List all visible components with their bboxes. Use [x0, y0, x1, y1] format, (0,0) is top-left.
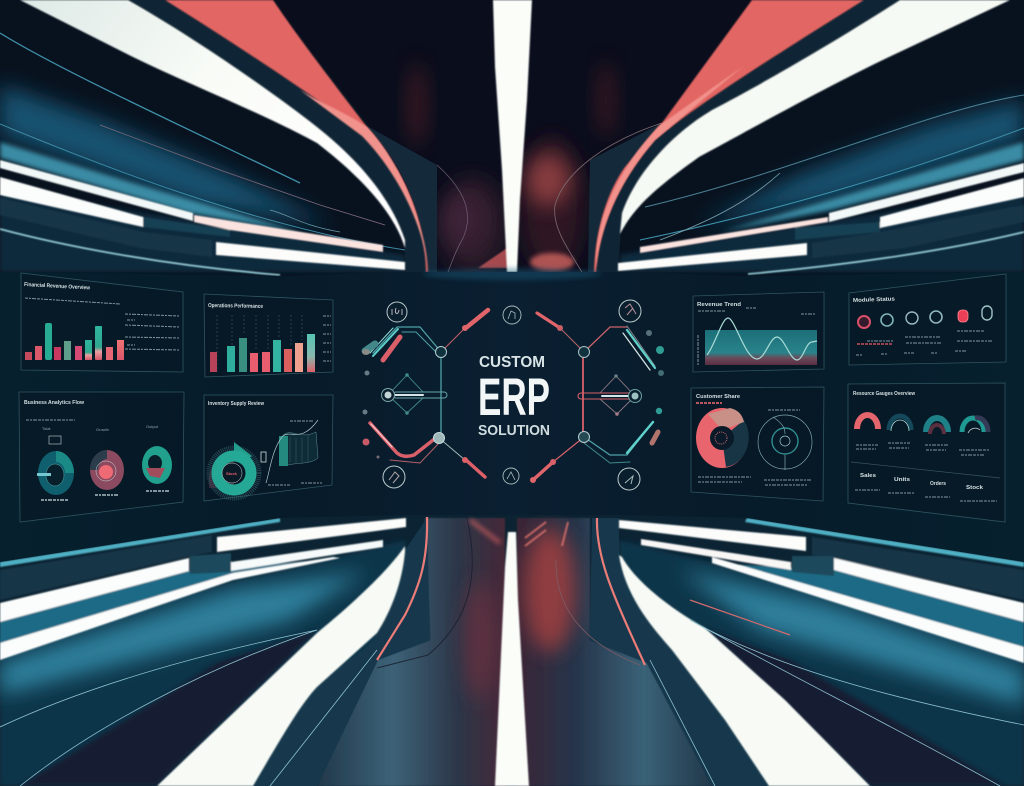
panel heading: Financial Revenue Overview — [24, 282, 91, 291]
panel heading: Module Status — [853, 297, 895, 304]
kpi labels: Sales — [860, 473, 876, 479]
donut one: Total — [42, 426, 51, 431]
title text: ERP — [478, 368, 550, 427]
panel heading: Revenue Trend — [697, 302, 742, 308]
panel: gauges and kpis — [848, 383, 1005, 522]
donut one — [37, 426, 74, 500]
status icons — [858, 306, 992, 328]
right dashboards — [691, 274, 1006, 522]
wave chart — [261, 420, 322, 485]
coral reflected lines — [377, 517, 790, 668]
coral donut — [696, 408, 749, 468]
centre floor — [317, 518, 505, 786]
white band right — [620, 0, 1010, 234]
centre white strip top — [493, 0, 532, 272]
donut three: Output — [146, 424, 159, 429]
bottom section: reflected light streaks — [0, 517, 1024, 786]
right nodes and icons — [530, 300, 664, 490]
white band bottom right — [619, 555, 870, 786]
donut three — [142, 424, 172, 491]
gauges — [857, 415, 988, 434]
outline donut — [758, 415, 812, 470]
coral band right — [594, 0, 864, 272]
title text: CUSTOM — [479, 354, 545, 371]
panel: donut and wave — [204, 395, 333, 501]
bars — [25, 323, 124, 360]
panel heading: Operations Performance — [208, 303, 263, 310]
kpi labels: Orders — [930, 481, 946, 487]
bars — [210, 334, 315, 372]
left circuit — [365, 310, 488, 477]
lighting bars bottom right — [619, 518, 1024, 663]
title text — [478, 354, 550, 439]
coral band left — [165, 0, 428, 272]
dark edge beside white bands — [128, 0, 428, 272]
thin bottom lines — [0, 620, 1024, 786]
central dark wall — [0, 268, 1024, 562]
donut: Stock — [226, 471, 238, 476]
kpi labels — [860, 473, 984, 491]
panel: icon metrics — [849, 274, 1006, 365]
right circuit — [533, 313, 658, 480]
panel: ring gauges — [691, 387, 824, 501]
kpi labels: Stock — [966, 485, 984, 491]
donut two — [90, 427, 124, 495]
panel heading: Business Analytics Flow — [24, 400, 85, 406]
right streak lines — [640, 95, 1024, 240]
white band bottom left — [157, 546, 405, 786]
lighting bars bottom left — [0, 518, 406, 660]
area chart — [698, 318, 817, 366]
kpi labels: Units — [894, 477, 910, 483]
panel heading: Customer Share — [696, 394, 740, 400]
top section: converging light streaks — [0, 0, 1024, 275]
left nodes and icons — [362, 302, 521, 488]
centre logo: custom erp solution — [362, 300, 664, 490]
left dashboards — [19, 273, 333, 522]
centre white strip bottom — [495, 532, 529, 786]
panel: line chart — [693, 292, 824, 372]
dark floor shapes — [0, 540, 405, 786]
panel: bar chart one — [21, 273, 183, 372]
teal bands left and right — [0, 142, 300, 232]
panel heading: Resource Gauges Overview — [853, 391, 916, 397]
dark strip beside bottom white bands — [253, 518, 430, 786]
lighting bars top left — [0, 160, 405, 275]
top centre wine glow — [270, 0, 755, 273]
teal band bottom right — [680, 570, 1024, 705]
panel: bar chart two — [204, 294, 333, 377]
panel: three donut charts — [19, 392, 184, 522]
panel heading: Inventory Supply Review — [208, 401, 265, 407]
donut two: Growth — [96, 427, 109, 432]
left streak lines — [0, 33, 405, 250]
teal band bottom left — [0, 572, 367, 695]
title text: SOLUTION — [478, 422, 550, 439]
white band left — [20, 0, 405, 248]
lighting bars top right — [618, 163, 1024, 274]
